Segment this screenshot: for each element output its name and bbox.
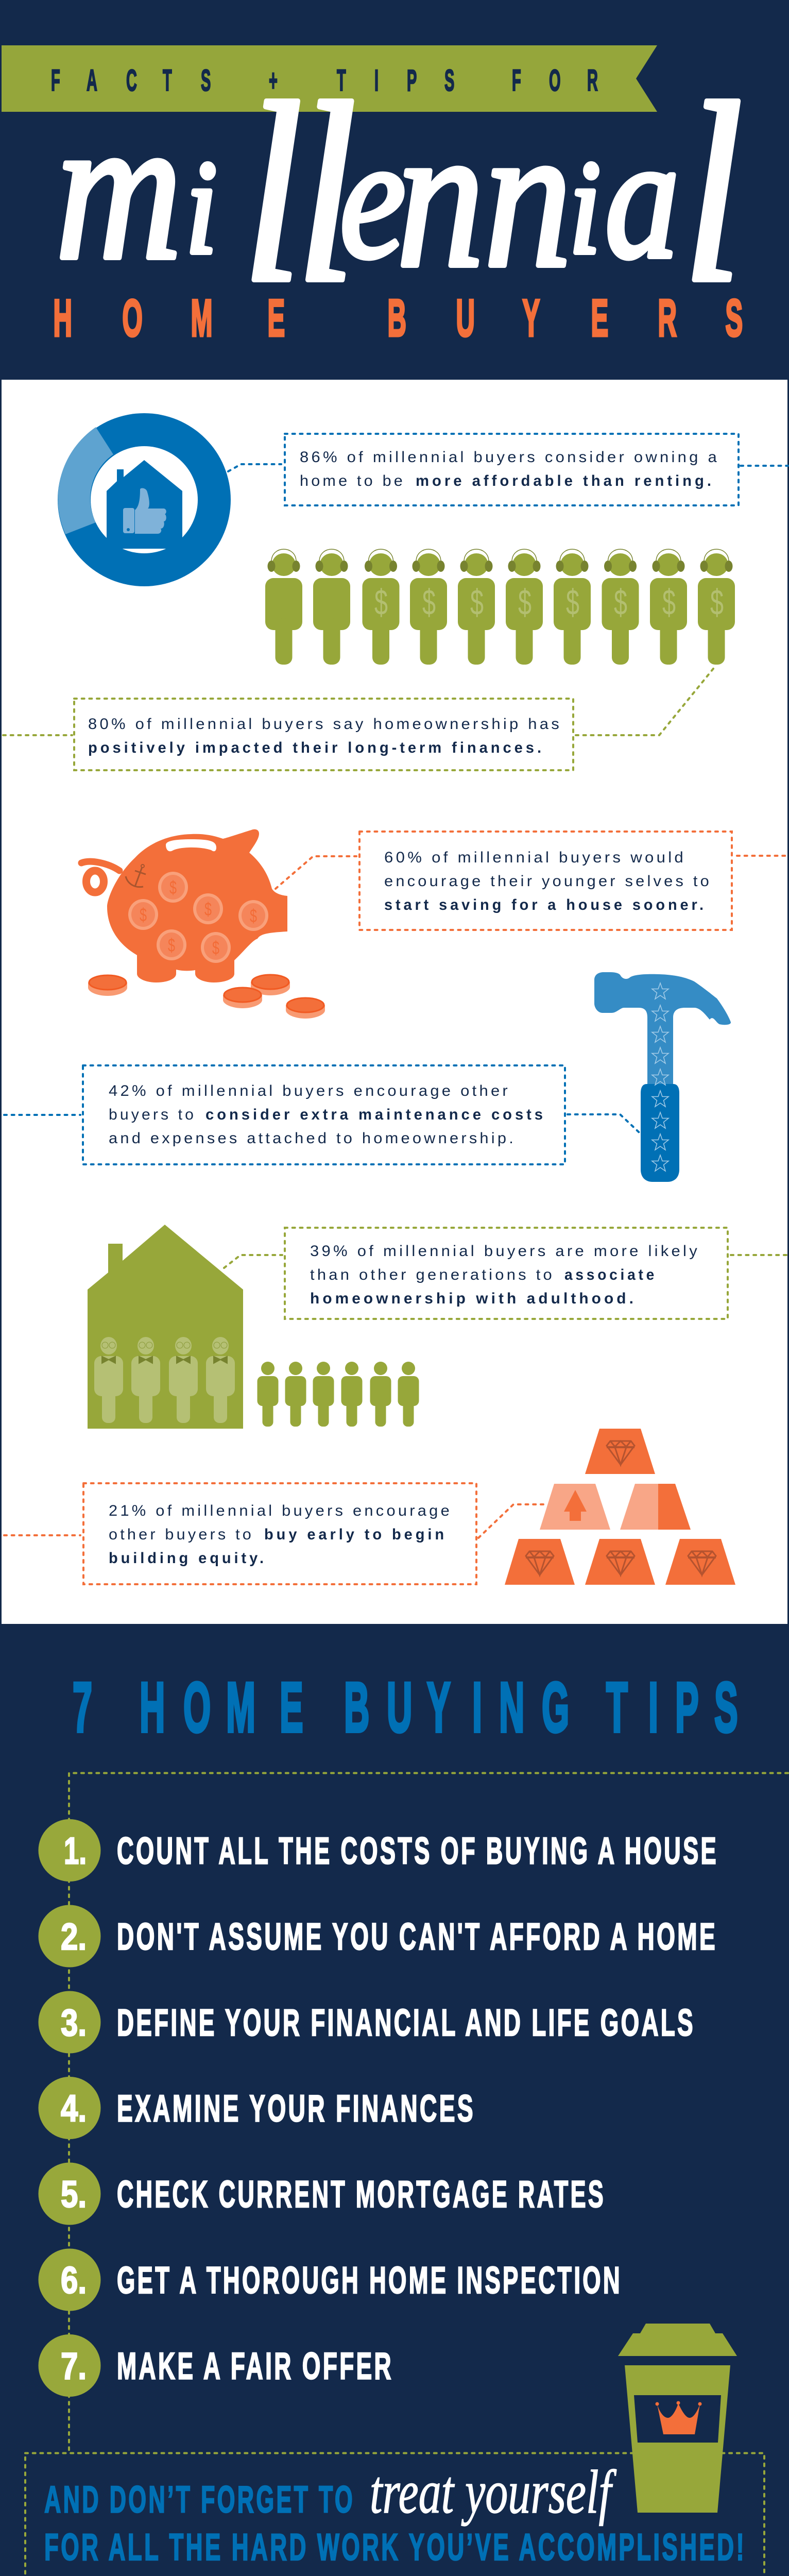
tip 1: 1. (64, 1830, 87, 1872)
icon row: ten people with headphones, eight with dollars: $ (614, 582, 627, 622)
icon: piggy bank with coins: $ (204, 899, 212, 920)
script title: millennial: i (185, 133, 217, 282)
icon: piggy bank with coins (81, 829, 325, 1019)
icon: coffee cup with crown (618, 2324, 737, 2513)
callout: 60 percent (276, 832, 787, 930)
tip 7: 7. (61, 2345, 87, 2387)
callout: 39 percent: associate (564, 1266, 657, 1283)
callout: 21 percent (4, 1483, 543, 1584)
callout: 86 percent: home to be (300, 472, 405, 489)
tip 5: 5. (61, 2174, 87, 2215)
icon row: ten people with headphones, eight with dollars: $ (566, 582, 579, 622)
callout: 86 percent (228, 434, 788, 505)
callout: 42 percent: buyers to (109, 1106, 196, 1123)
callout: 86 percent: 86% of millennial buyers consider owning a (300, 449, 719, 466)
tip 3 (38, 1991, 695, 2054)
icon row: ten people with headphones, eight with dollars: $ (662, 582, 676, 622)
tip 7 (38, 2334, 393, 2397)
callout: 39 percent: 39% of millennial buyers are more likely (310, 1243, 700, 1260)
icon row: ten people with headphones, eight with dollars: $ (710, 582, 724, 622)
callout: 42 percent: and expenses attached to homeownership. (109, 1130, 516, 1147)
icon row: ten people with headphones, eight with dollars: $ (518, 582, 531, 622)
callout: 42 percent (4, 1065, 639, 1164)
callout: 39 percent: homeownership with adulthood. (310, 1290, 637, 1307)
callout: 39 percent: than other generations to (310, 1266, 555, 1283)
closing message: AND DON’T FORGET TO (44, 2479, 355, 2520)
closing message (44, 2458, 746, 2568)
tip 4: 4. (61, 2088, 87, 2130)
header ribbon (2, 45, 657, 112)
callout: 42 percent: 42% of millennial buyers encourage other (109, 1082, 510, 1099)
icon: piggy bank with coins: $ (169, 877, 177, 898)
tip 2: 2. (61, 1916, 87, 1958)
icon row: ten people with headphones, eight with dollars: $ (422, 582, 436, 622)
subtitle: home buyers: HOME BUYERS (54, 289, 743, 347)
callout: 80 percent: positively impacted their long-term finances. (88, 739, 544, 756)
callout: 60 percent: start saving for a house sooner. (384, 896, 707, 913)
script title: millennial: i (569, 133, 601, 282)
icon: piggy bank with coins: $ (212, 937, 219, 958)
heading: 7 home buying tips: 7 HOME BUYING TIPS (73, 1668, 738, 1747)
white facts panel (2, 380, 787, 1624)
callout: 21 percent: building equity. (109, 1550, 267, 1567)
tip 4: EXAMINE YOUR FINANCES (117, 2088, 475, 2130)
icon: house with people inside and small people outside (88, 1225, 419, 1429)
ribbon title: FACTS + TIPS FOR (51, 63, 598, 97)
callout: 42 percent: consider extra maintenance costs (205, 1106, 546, 1123)
tip 2 (38, 1905, 717, 1967)
callout: 86 percent: more affordable than renting. (416, 472, 714, 489)
tip 6: 6. (61, 2260, 87, 2301)
icon: hammer with stars (594, 972, 731, 1182)
icon row: ten people with headphones, eight with dollars (265, 549, 735, 665)
script title: millennial: a (605, 101, 679, 295)
closing frame (25, 2453, 764, 2576)
script title: millennial: m (56, 74, 182, 302)
callout: 60 percent: encourage their younger selves to (384, 873, 712, 890)
icon: pyramid of gold bars (505, 1429, 735, 1585)
tip 4 (38, 2077, 475, 2139)
callout: 39 percent (224, 1228, 788, 1319)
callout: 80 percent (3, 666, 715, 770)
closing message: treat yourself (370, 2458, 617, 2526)
icon: piggy bank with coins: $ (250, 905, 257, 926)
tip 6 (38, 2248, 622, 2311)
script title: millennial: l (296, 51, 357, 336)
callout: 60 percent: 60% of millennial buyers would (384, 849, 686, 866)
script title: millennial: e (340, 101, 406, 295)
callout: 21 percent: other buyers to (109, 1526, 254, 1543)
icon: piggy bank with coins: $ (168, 935, 175, 956)
tips frame line (69, 1773, 788, 2452)
icon: piggy bank with coins: $ (140, 904, 147, 925)
callout: 80 percent: 80% of millennial buyers say homeownership has (88, 716, 562, 733)
script title: millennial: n (397, 82, 484, 310)
icon: donut with house and thumbs-up (58, 413, 231, 586)
tip 5 (38, 2163, 606, 2225)
script title: millennial: n (484, 82, 572, 310)
callout: 21 percent: buy early to begin (264, 1526, 447, 1543)
script title: millennial: l (682, 51, 743, 336)
script title: millennial: l (242, 51, 303, 336)
tip 1 (38, 1819, 718, 1882)
tip 3: 3. (61, 2002, 87, 2044)
callout: 21 percent: 21% of millennial buyers encourage (109, 1502, 452, 1519)
tip 7: MAKE A FAIR OFFER (117, 2345, 393, 2387)
icon row: ten people with headphones, eight with dollars: $ (470, 582, 484, 622)
icon row: ten people with headphones, eight with dollars: $ (374, 582, 388, 622)
